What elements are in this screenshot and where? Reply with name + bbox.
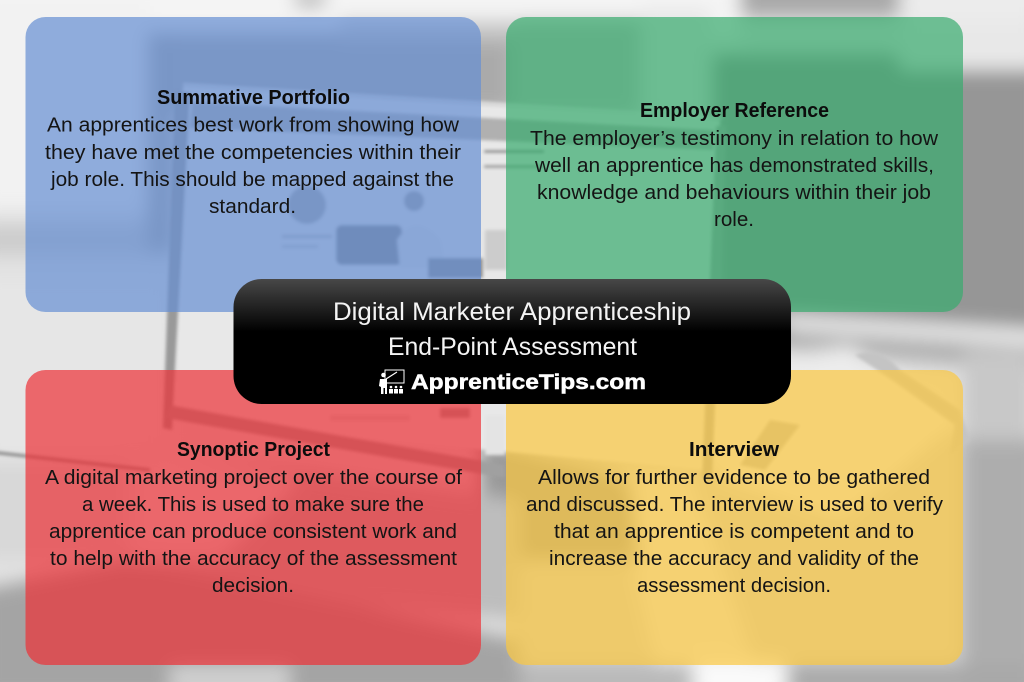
text block: Interview description: that an apprentice is competent and to	[554, 521, 914, 543]
text block: Interview description: increase the accuracy and validity of the	[549, 548, 919, 570]
text block: Summative Portfolio description	[45, 114, 461, 218]
title line 2: End-Point Assessment	[388, 333, 637, 361]
heading: Employer Reference: Employer Reference	[640, 100, 829, 122]
text block: Interview description: Allows for further evidence to be gathered	[538, 467, 930, 489]
heading: Interview: Interview	[689, 439, 779, 461]
icon: teacher at board	[379, 370, 404, 394]
text block: Employer Reference description: The employer’s testimony in relation to how	[530, 128, 939, 150]
heading: Summative Portfolio: Summative Portfolio	[157, 87, 350, 109]
central title panel	[234, 279, 791, 404]
text block: Synoptic Project description: decision.	[212, 575, 294, 597]
text block: Summative Portfolio description: they have met the competencies within their	[45, 142, 461, 164]
text block: Synoptic Project description	[45, 467, 462, 597]
text block: Summative Portfolio description: job role. This should be mapped against the	[50, 169, 454, 191]
laptop screen	[0, 84, 970, 480]
heading: Synoptic Project: Synoptic Project	[177, 439, 330, 461]
text block: Interview description	[526, 467, 943, 597]
text block: Interview description: assessment decision.	[637, 575, 831, 597]
text block: Synoptic Project description: to help with the accuracy of the assessment	[50, 548, 457, 570]
text block: Employer Reference description: well an apprentice has demonstrated skills,	[534, 155, 934, 177]
panel: Synoptic Project	[26, 370, 481, 665]
panel: Interview	[506, 370, 963, 665]
text block: Summative Portfolio description: An apprentices best work from showing how	[47, 114, 460, 136]
brand: ApprenticeTips.com: ApprenticeTips.com	[411, 371, 646, 394]
title line 1: Digital Marketer Apprenticeship	[333, 298, 691, 326]
text block: Interview description: and discussed. The interview is used to verify	[526, 494, 943, 516]
panel: Employer Reference	[506, 17, 963, 312]
text block: Synoptic Project description: a week. This is used to make sure the	[82, 494, 424, 516]
text block: Employer Reference description: role.	[714, 209, 754, 231]
text block: Employer Reference description	[530, 128, 939, 231]
text block: Synoptic Project description: A digital marketing project over the course of	[45, 467, 462, 489]
text block: Summative Portfolio description: standard.	[209, 196, 296, 218]
panel: Summative Portfolio	[26, 17, 481, 312]
text block: Synoptic Project description: apprentice can produce consistent work and	[49, 521, 457, 543]
text block: Employer Reference description: knowledge and behaviours within their job	[537, 182, 931, 204]
